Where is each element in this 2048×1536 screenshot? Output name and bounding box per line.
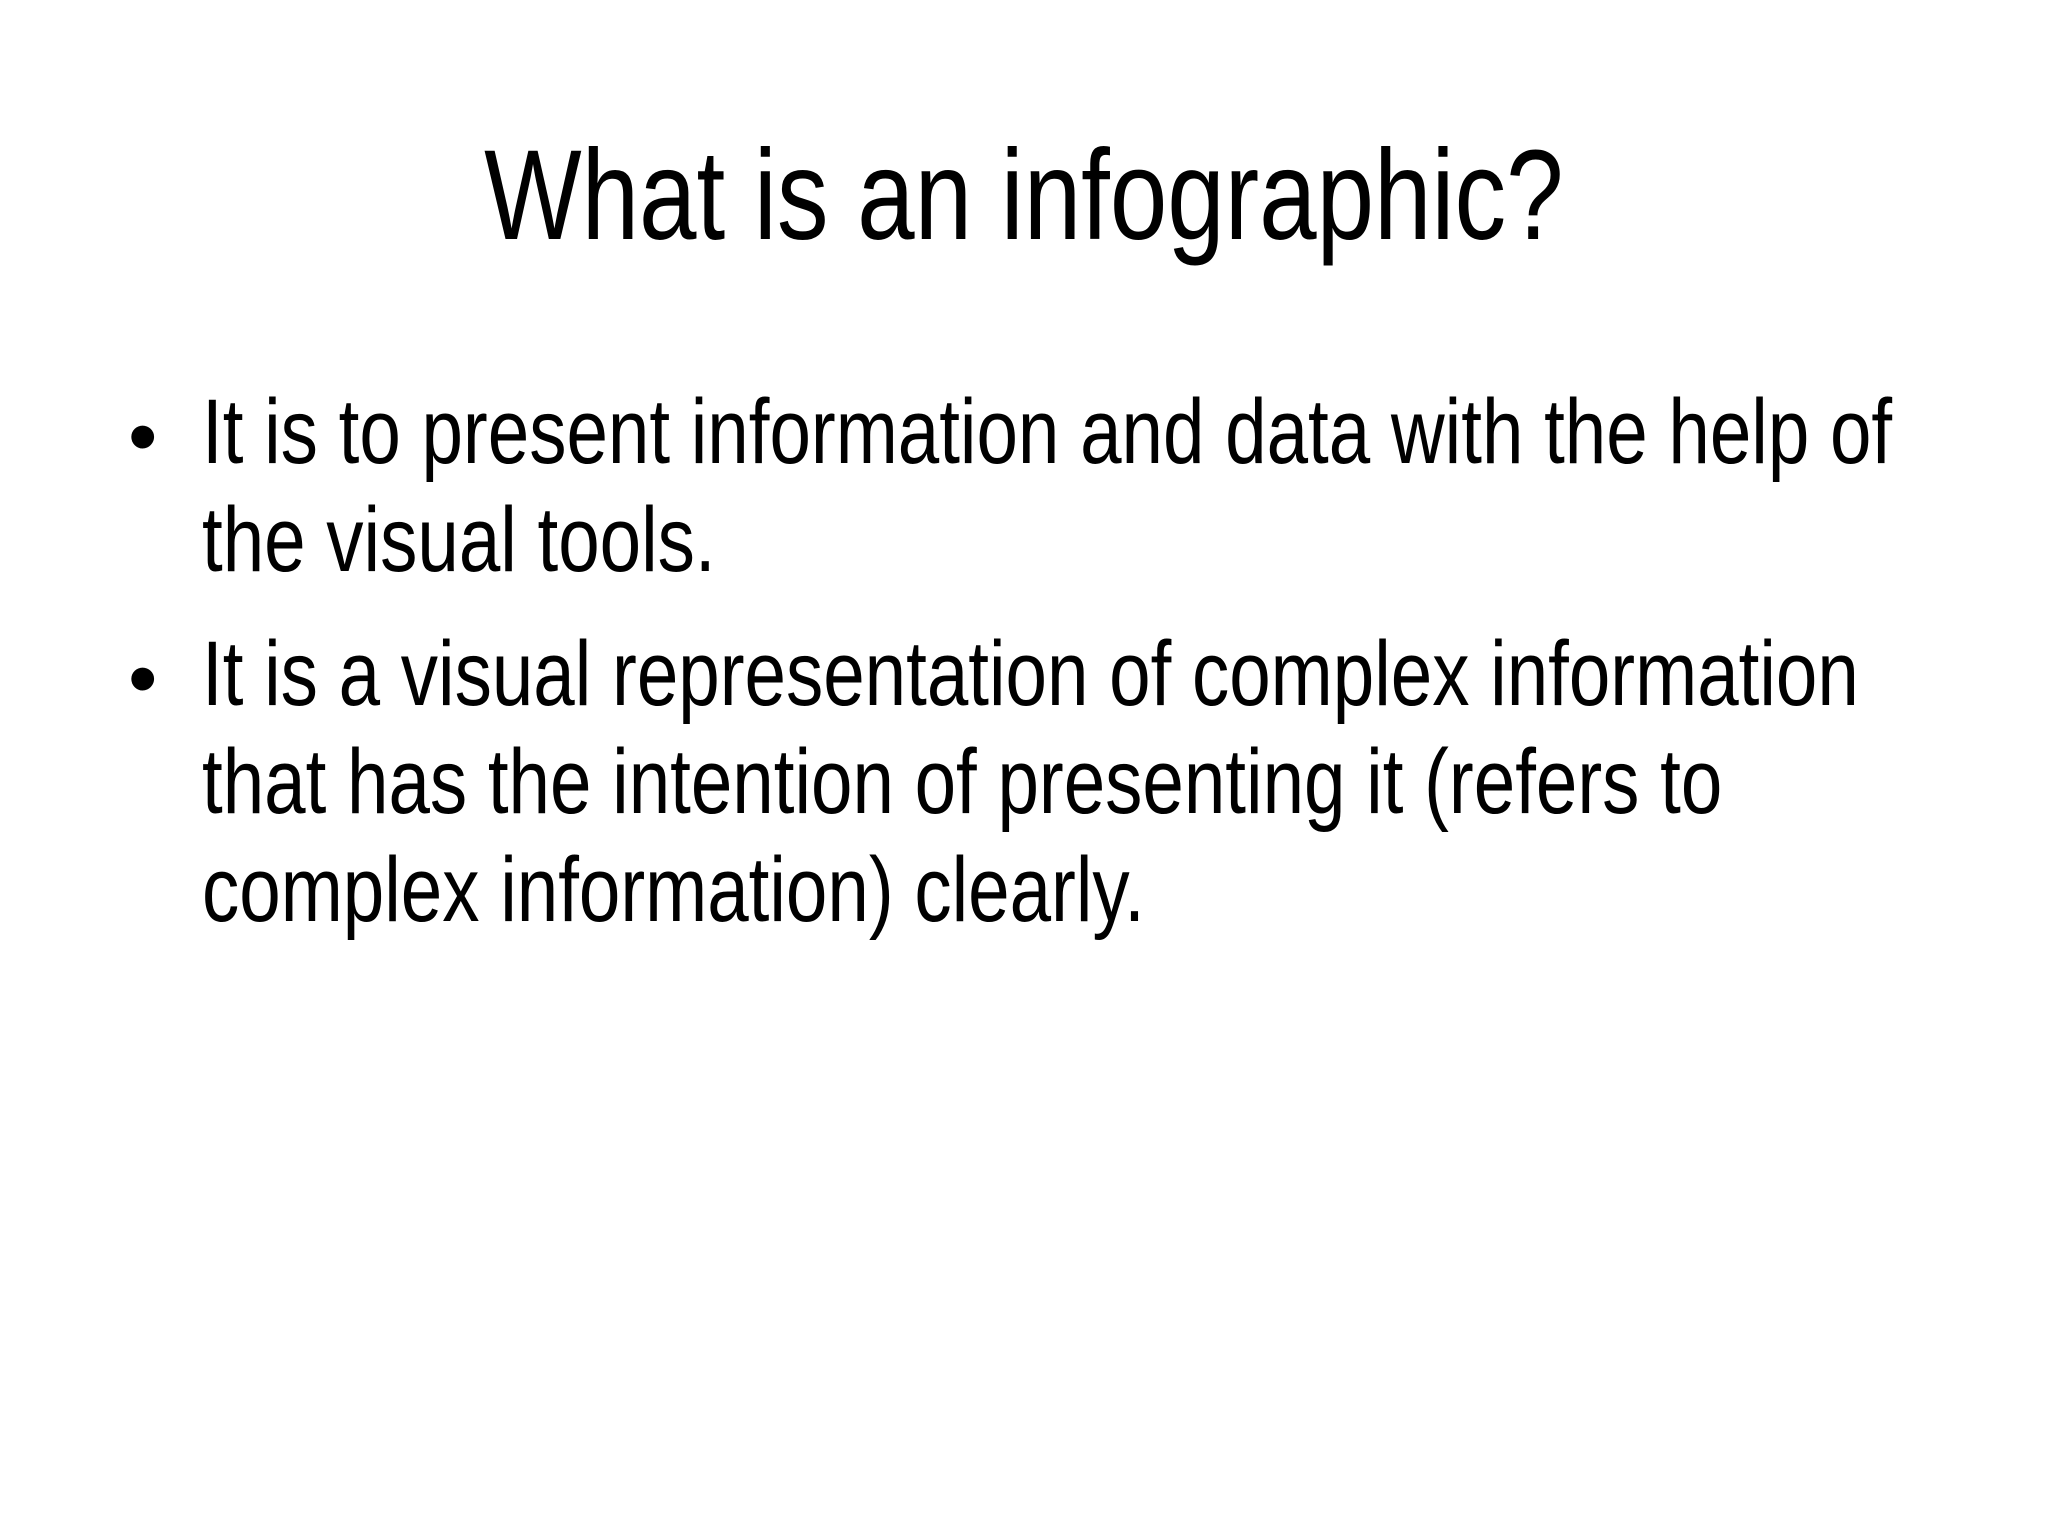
bullet marker 1: • bbox=[128, 389, 157, 483]
bullet 2 bbox=[128, 623, 1859, 941]
bullet 1 text bbox=[202, 381, 1892, 591]
bullet 1 text: the visual tools. bbox=[202, 489, 716, 591]
bullet 2 text: It is a visual representation of complex information bbox=[202, 623, 1859, 725]
bullet 2 text bbox=[202, 623, 1859, 941]
bullet 2 text: complex information) clearly. bbox=[202, 839, 1145, 941]
bullet 1 bbox=[128, 381, 1892, 591]
bullet 1 text: It is to present information and data with the help of bbox=[202, 381, 1892, 483]
bullet marker 2: • bbox=[128, 631, 157, 725]
bullet 2 text: that has the intention of presenting it (refers to bbox=[202, 731, 1722, 833]
title: What is an infographic? bbox=[484, 124, 1564, 267]
